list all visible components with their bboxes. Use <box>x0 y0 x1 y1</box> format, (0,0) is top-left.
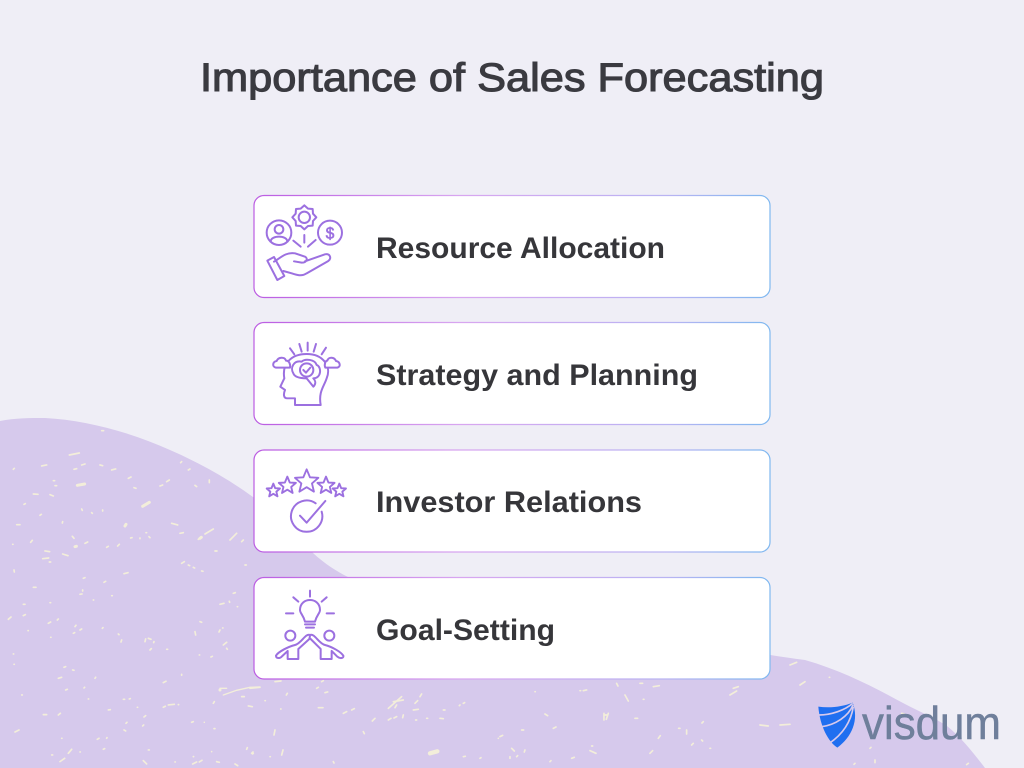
card: Resource Allocation <box>254 196 770 298</box>
card: Strategy and Planning <box>254 322 770 424</box>
logo shield <box>818 703 855 748</box>
icon: head with brain and check <box>273 343 340 405</box>
logo wordmark: visdum <box>862 697 1001 749</box>
card: Investor Relations <box>254 450 770 552</box>
label: Goal-Setting <box>376 614 555 647</box>
title: Importance of Sales Forecasting <box>200 56 824 100</box>
label: Strategy and Planning <box>376 359 698 392</box>
card: Goal-Setting <box>254 578 770 679</box>
logo: visdum <box>818 697 1001 749</box>
label: Resource Allocation <box>376 232 665 265</box>
background blob with speckles <box>0 418 985 768</box>
icon: hand holding gear, person and dollar <box>267 205 342 280</box>
icon: hand holding gear, person and dollar: $ <box>326 225 335 242</box>
icon: five stars and check circle <box>267 469 346 532</box>
label: Investor Relations <box>376 486 642 519</box>
icon: two people under a light bulb <box>276 591 343 659</box>
